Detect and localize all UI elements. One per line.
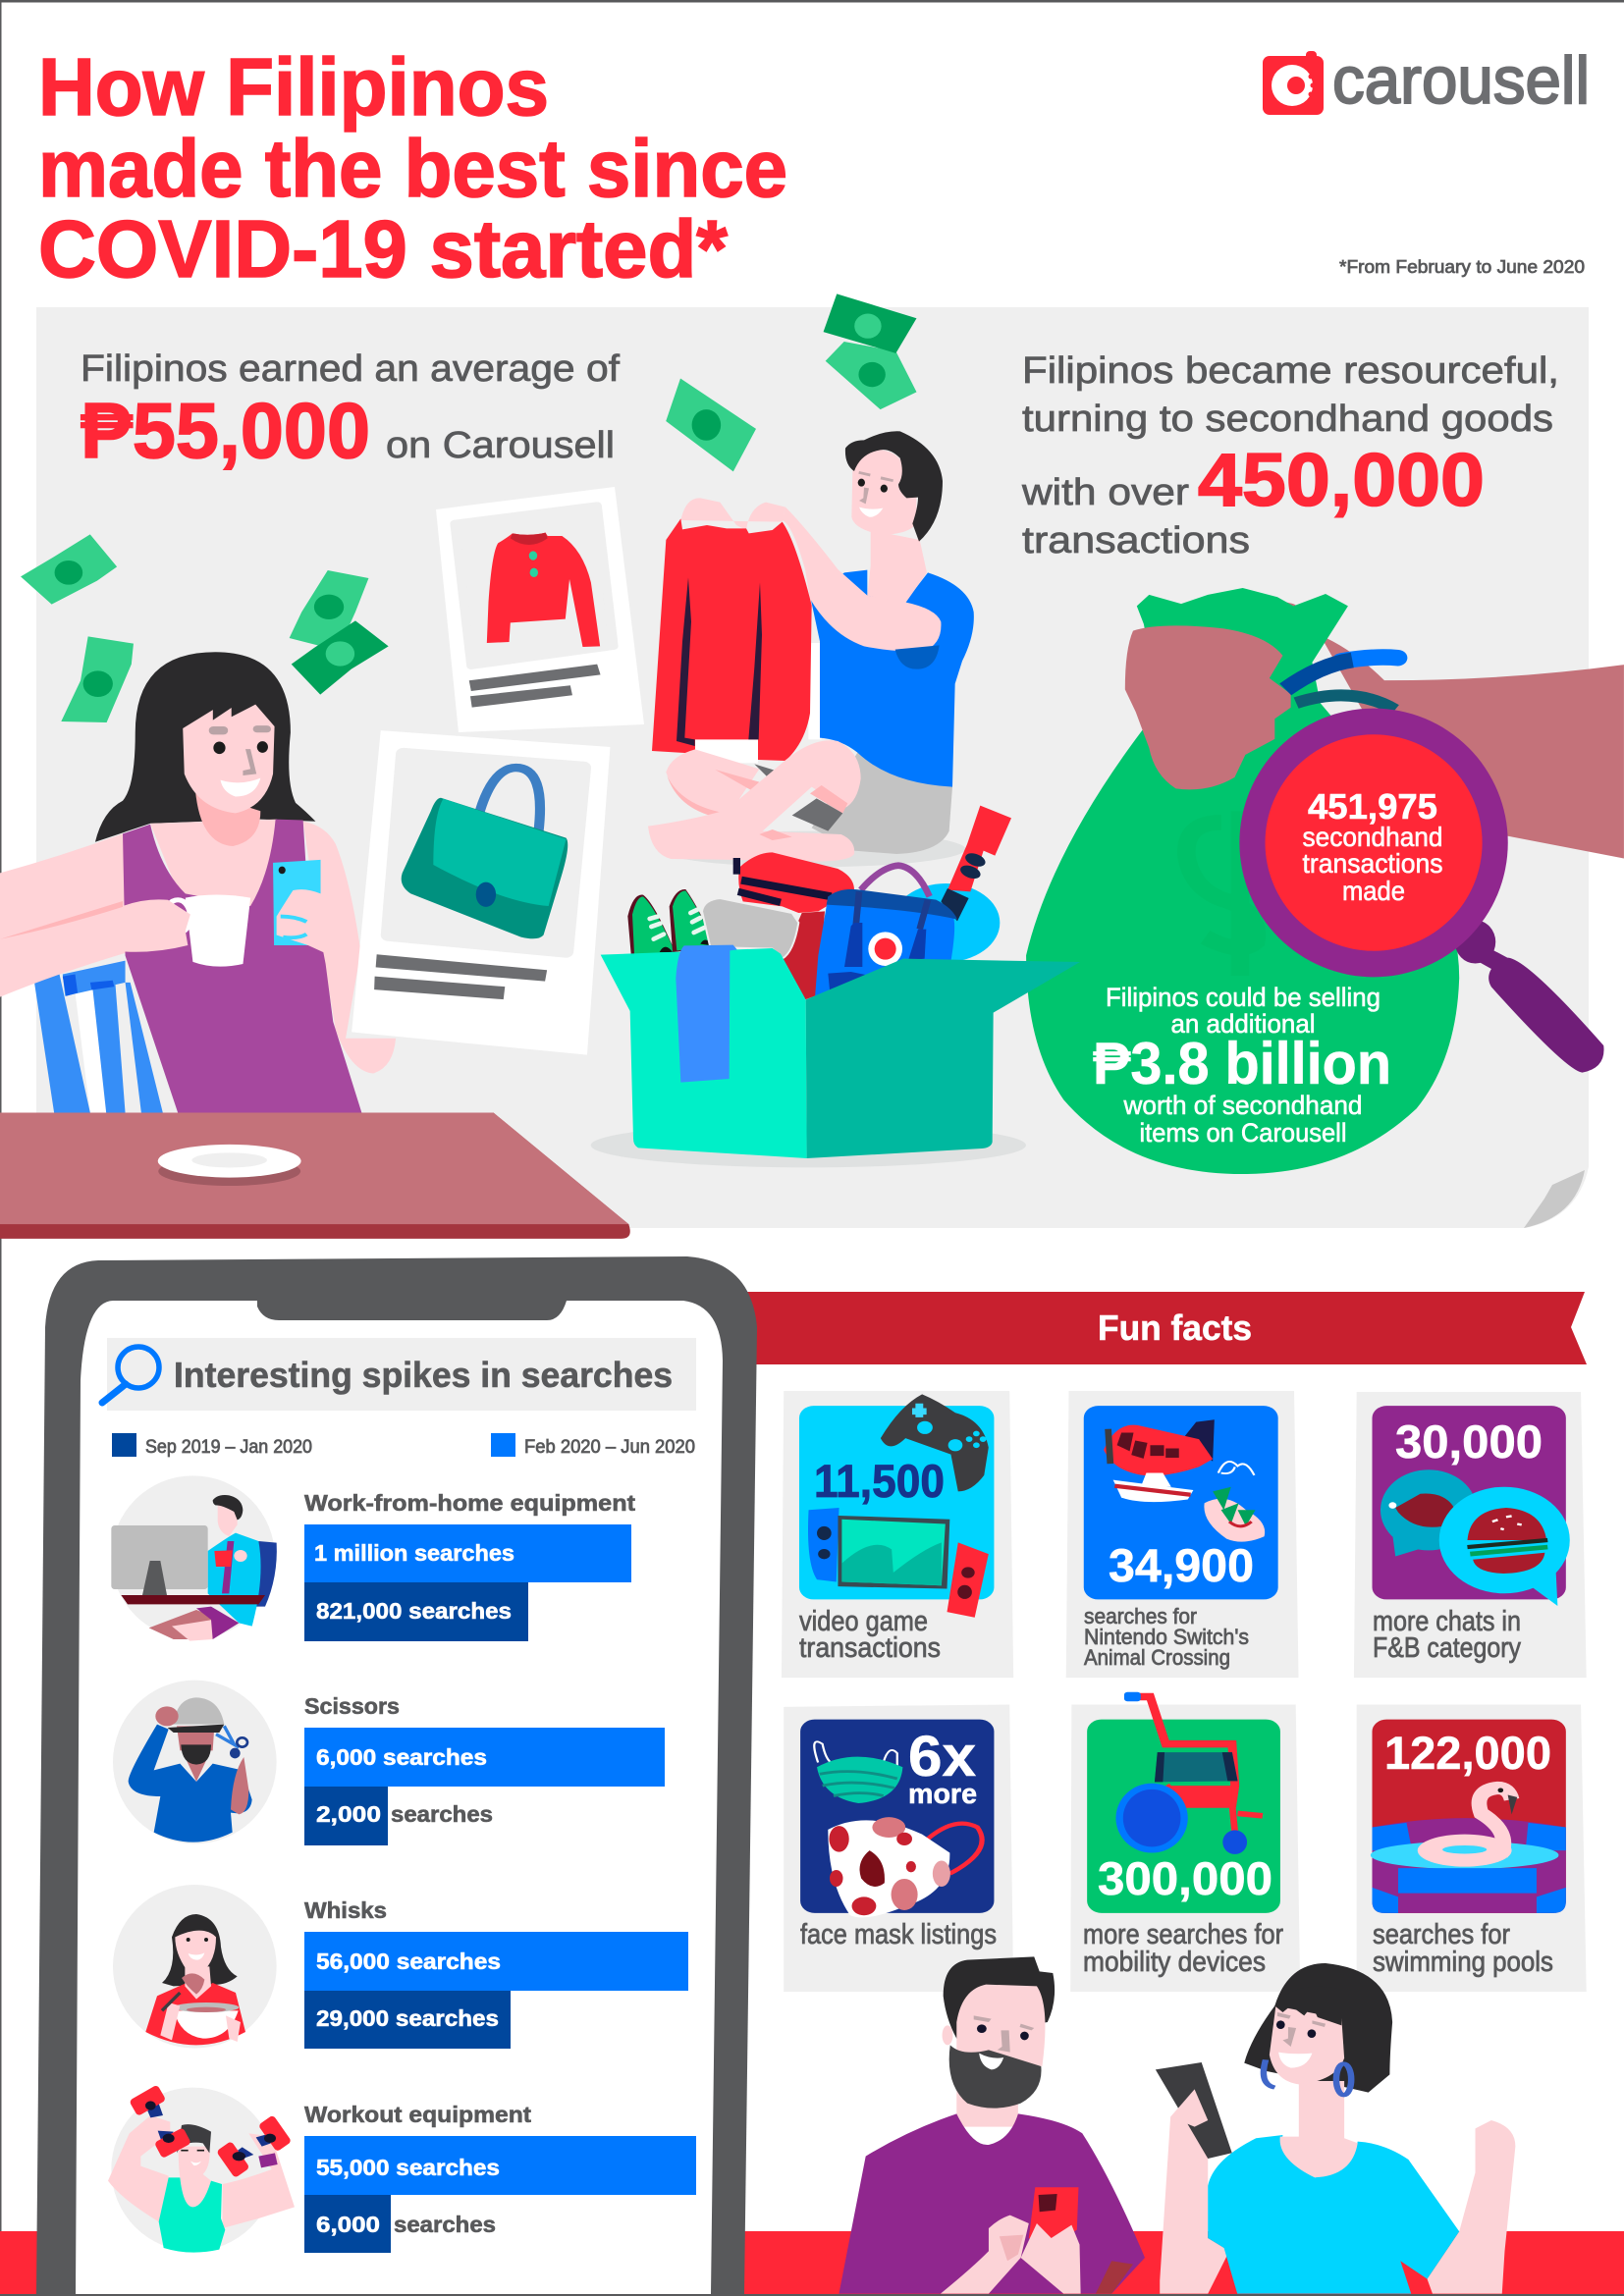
- illustration: man cutting hair with bowl: [113, 1681, 277, 1843]
- heading: [107, 1338, 696, 1411]
- text: secondhand transactions: transactions: [1022, 520, 1250, 561]
- panel: fun fact mobility devices: 300,000: [1098, 1852, 1272, 1904]
- icon: falling banknotes left: [21, 534, 389, 722]
- panel: fun fact swimming pools: 122,000: [1384, 1727, 1551, 1779]
- chair: [34, 961, 163, 1112]
- title: made the best since: [38, 123, 787, 214]
- text: magnifier stat: [1302, 786, 1443, 906]
- text: magnifier stat: transactions: [1302, 848, 1443, 879]
- legend: [112, 1433, 695, 1458]
- illustration: box of secondhand goods: [591, 806, 1080, 1167]
- page curl: [1524, 1170, 1585, 1228]
- illustration: man holding sweater: [648, 431, 974, 867]
- panel: fun fact face masks: more: [908, 1779, 977, 1810]
- text: magnifier stat: secondhand: [1302, 822, 1443, 852]
- handbag: [402, 768, 568, 938]
- icon: chat bubbles with food: [1380, 1469, 1570, 1606]
- text: secondhand transactions: 450,000: [1198, 439, 1485, 522]
- category: whisks: 56,000 searches: [316, 1949, 501, 1974]
- category: whisks: Whisks: [304, 1897, 387, 1923]
- blue cloth: [676, 945, 737, 1083]
- banner: fun facts: [727, 1292, 1587, 1364]
- panel: fun fact food chats: F&B category: [1373, 1632, 1521, 1664]
- text: average earnings: Filipinos earned an average of: [81, 348, 620, 390]
- crossed legs: [648, 740, 861, 861]
- title: [38, 41, 787, 294]
- category: workout equipment: 55,000 searches: [316, 2155, 500, 2180]
- legend: Feb 2020 – Jun 2020: [524, 1437, 695, 1458]
- text: secondhand transactions: with over: [1021, 472, 1189, 513]
- phone: [273, 860, 351, 956]
- legend: Sep 2019 – Jan 2020: [145, 1437, 312, 1458]
- text: secondhand transactions: Filipinos became resourceful,: [1022, 350, 1559, 392]
- category: scissors: 2,000: [316, 1801, 381, 1827]
- listing card: handbag: [352, 730, 610, 1055]
- stand mixer: [702, 852, 854, 999]
- text: average earnings: on Carousell: [386, 425, 615, 466]
- category: work-from-home equipment: 821,000 searches: [316, 1598, 512, 1624]
- table with plate: [0, 1112, 630, 1239]
- icon: game controller: [881, 1394, 989, 1491]
- icon: seaplane: [1104, 1419, 1254, 1502]
- arm: [1321, 635, 1624, 859]
- text: average earnings: [81, 348, 620, 474]
- red sweater held up: [652, 518, 812, 761]
- title: How Filipinos: [38, 41, 549, 133]
- icon: inflatable pool and flamingo: [1371, 1788, 1566, 1913]
- icon: wheelchair: [1115, 1692, 1263, 1854]
- panel: fun fact face masks: face mask listings: [800, 1919, 997, 1950]
- text: money bag stat: an additional: [1170, 1009, 1316, 1039]
- head: [845, 431, 943, 542]
- phone frame: [36, 1256, 757, 2294]
- red phone: [1029, 2187, 1078, 2246]
- icon: handheld console: [808, 1508, 989, 1618]
- text: money bag stat: items on Carousell: [1139, 1118, 1347, 1148]
- icon: printed mask: [828, 1817, 982, 1917]
- icon: island: [1204, 1487, 1265, 1542]
- illustration: man with beard and red phone: [839, 1956, 1145, 2294]
- text: money bag stat: [1093, 983, 1391, 1148]
- fist: [1125, 625, 1291, 789]
- panel: fun fact food chats: 30,000: [1395, 1415, 1543, 1468]
- panel: fun fact video games: transactions: [799, 1632, 941, 1664]
- phone mockup: interesting spikes in searches: [36, 1256, 757, 2294]
- category: scissors: [304, 1693, 665, 1845]
- category: workout equipment: [304, 2102, 696, 2253]
- panel: fun fact face masks: [784, 1705, 1013, 1992]
- dark phone: [1156, 2062, 1232, 2159]
- panel: fun fact face masks: 6x: [908, 1725, 976, 1789]
- shorts: [812, 753, 952, 854]
- panel: fun fact Animal Crossing: 34,900: [1109, 1539, 1254, 1591]
- category: work-from-home equipment: Work-from-home equipment: [304, 1490, 635, 1516]
- sack: [1026, 588, 1459, 1174]
- text: average earnings: ₱55,000: [81, 387, 370, 474]
- dress: [123, 820, 361, 1112]
- panel: fun fact mobility devices: mobility devices: [1083, 1947, 1266, 1978]
- text: money bag stat: worth of secondhand: [1123, 1091, 1363, 1120]
- panel: fun fact mobility devices: more searches for: [1083, 1919, 1283, 1950]
- category: whisks: 29,000 searches: [316, 2005, 499, 2031]
- panel: fun fact video games: 11,500: [814, 1455, 945, 1507]
- text: money bag stat: Filipinos could be selling: [1106, 983, 1380, 1012]
- icon: striped mask: [814, 1741, 902, 1803]
- banner: fun facts: Fun facts: [1098, 1308, 1252, 1348]
- illustration: money bag gripped by hand: [1026, 588, 1624, 1174]
- category: workout equipment: Workout equipment: [304, 2102, 531, 2127]
- category: workout equipment: searches: [394, 2212, 496, 2237]
- panel: fun fact Animal Crossing: Nintendo Switch's: [1084, 1625, 1249, 1649]
- backpack: [815, 806, 1011, 998]
- footnote: *From February to June 2020: [1339, 257, 1585, 277]
- sweater: [487, 533, 600, 647]
- text: magnifier stat: 451,975: [1308, 786, 1437, 827]
- panel: fun fact swimming pools: swimming pools: [1373, 1947, 1553, 1978]
- panel: fun fact Animal Crossing: Animal Crossing: [1084, 1645, 1230, 1670]
- category: scissors: 6,000 searches: [316, 1744, 487, 1770]
- category: work-from-home equipment: [304, 1490, 635, 1641]
- category: work-from-home equipment: 1 million searches: [314, 1540, 514, 1566]
- box: [601, 945, 1080, 1158]
- illustration: woman with earrings and phone: [1156, 1963, 1515, 2294]
- panel: fun fact food chats: more chats in: [1373, 1606, 1521, 1637]
- t-shirt: [810, 570, 974, 787]
- panel: fun fact food chats: [1354, 1392, 1587, 1678]
- panel: fun fact video games: [782, 1391, 1013, 1678]
- panel: earnings and secondhand goods: [36, 307, 1589, 1228]
- text: secondhand transactions: [1021, 350, 1559, 561]
- illustration: woman whisking: [113, 1885, 277, 2049]
- panel: fun fact mobility devices: [1070, 1692, 1300, 1992]
- string: [1285, 658, 1398, 710]
- panel: fun fact Animal Crossing: [1066, 1391, 1299, 1678]
- illustration: work from home man: [111, 1475, 277, 1641]
- category: scissors: searches: [391, 1801, 493, 1827]
- text: magnifier stat: made: [1342, 876, 1405, 906]
- panel: fun fact video games: video game: [799, 1606, 928, 1637]
- text: secondhand transactions: turning to secondhand goods: [1022, 399, 1553, 440]
- coffee cup: [165, 894, 250, 967]
- illustration: man lifting dumbbells: [108, 2084, 295, 2253]
- earrings: [1264, 2059, 1351, 2095]
- panel: fun fact swimming pools: searches for: [1373, 1919, 1510, 1950]
- category: whisks: [304, 1897, 688, 2049]
- category: scissors: Scissors: [304, 1693, 400, 1719]
- title: COVID-19 started*: [38, 203, 729, 294]
- icon: falling banknotes top: [666, 294, 916, 471]
- panel: fun fact Animal Crossing: searches for: [1084, 1604, 1197, 1629]
- magnifying glass: [1239, 709, 1604, 1073]
- icon: search magnifier: [102, 1347, 159, 1403]
- panel: fun fact swimming pools: [1357, 1705, 1587, 1992]
- face: [183, 705, 275, 813]
- text: money bag stat: ₱3.8 billion: [1093, 1031, 1391, 1096]
- bottom red strip: [0, 2231, 1624, 2294]
- illustration: woman with coffee and phone: [0, 652, 396, 1112]
- heading: Interesting spikes in searches: [174, 1355, 673, 1395]
- logo: carousell: carousell: [1332, 43, 1590, 118]
- listing card: sweater: [436, 487, 644, 732]
- sneakers: [627, 889, 715, 954]
- dollar mark: [1186, 811, 1257, 976]
- category: workout equipment: 6,000: [316, 2212, 380, 2237]
